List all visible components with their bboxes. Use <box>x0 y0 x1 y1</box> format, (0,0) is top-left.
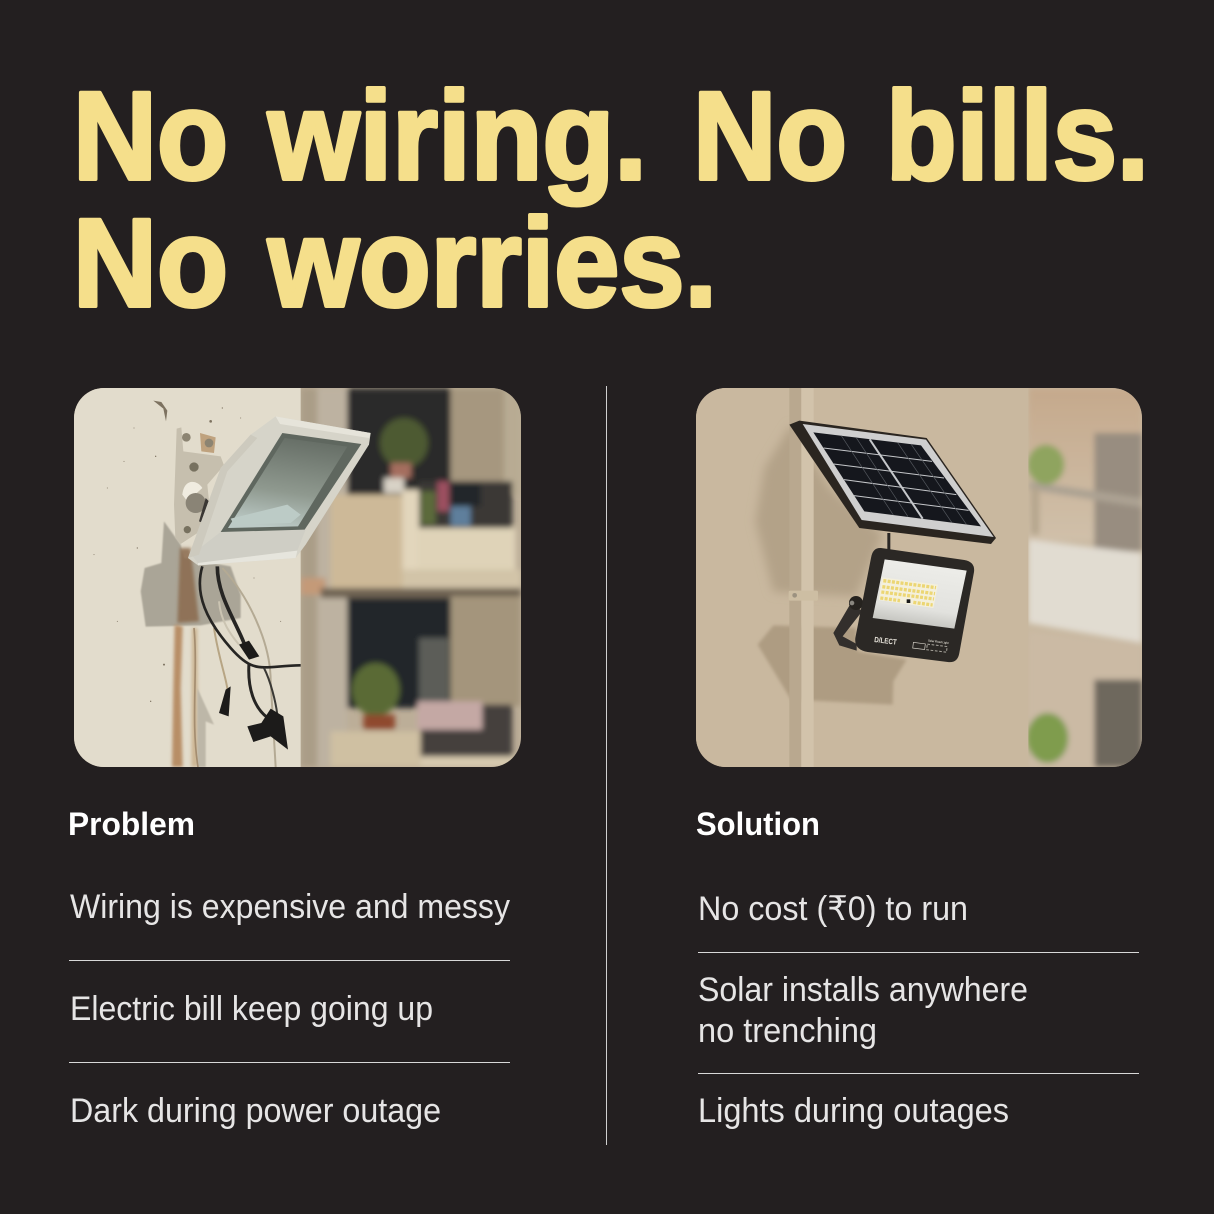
title: wiring. <box>267 67 647 206</box>
rust streaks <box>172 548 199 767</box>
panel: problem <box>68 806 510 1130</box>
lamp spec labels: Solar Flood Light <box>928 639 949 645</box>
solution item 3: Lights during outages <box>698 1092 1009 1130</box>
wall <box>74 388 301 767</box>
solution item 2 <box>698 971 1028 1050</box>
solution item 2: Solar installs anywhere <box>698 971 1028 1009</box>
lamp reflector <box>873 559 967 629</box>
electrical tape <box>219 641 288 750</box>
blurred apartment background <box>301 388 521 767</box>
solar panel shadow <box>755 425 883 596</box>
problem item 3: Dark during power outage <box>70 1092 441 1130</box>
title: bills. <box>886 67 1149 206</box>
bracket <box>833 596 863 651</box>
bracket <box>174 428 224 544</box>
wall <box>696 388 1028 767</box>
photo: problem, old wired floodlight <box>74 388 521 767</box>
pipe <box>789 388 818 767</box>
solution item 1: No cost (₹0) to run <box>698 890 968 928</box>
title: worries. <box>267 194 717 333</box>
LED array <box>879 577 938 608</box>
lamp body <box>855 548 974 662</box>
title: No <box>73 194 228 333</box>
title: No <box>693 67 847 206</box>
title: No <box>73 67 228 206</box>
wall shadow <box>141 521 241 627</box>
lamp housing <box>188 416 371 565</box>
wires <box>194 566 301 767</box>
problem item 1: Wiring is expensive and messy <box>70 888 510 926</box>
column divider <box>606 386 608 1145</box>
panel: solution <box>696 806 1139 1130</box>
heading: solution: Solution <box>696 806 820 842</box>
lamp spec labels <box>912 640 949 653</box>
lamp shadow <box>758 625 907 705</box>
lamp lens <box>221 433 361 532</box>
blurred apartment background <box>1027 388 1142 767</box>
problem item 2: Electric bill keep going up <box>70 990 433 1028</box>
wire shadows <box>197 688 214 767</box>
cable <box>887 533 890 550</box>
lamp logo: D/LECT <box>874 635 898 647</box>
wall specks and stains <box>93 401 281 702</box>
title <box>73 67 1149 333</box>
solar panel <box>789 421 996 544</box>
photo: solution, solar floodlight <box>696 388 1142 767</box>
solution item 2: no trenching <box>698 1012 877 1050</box>
heading: problem: Problem <box>68 806 195 842</box>
